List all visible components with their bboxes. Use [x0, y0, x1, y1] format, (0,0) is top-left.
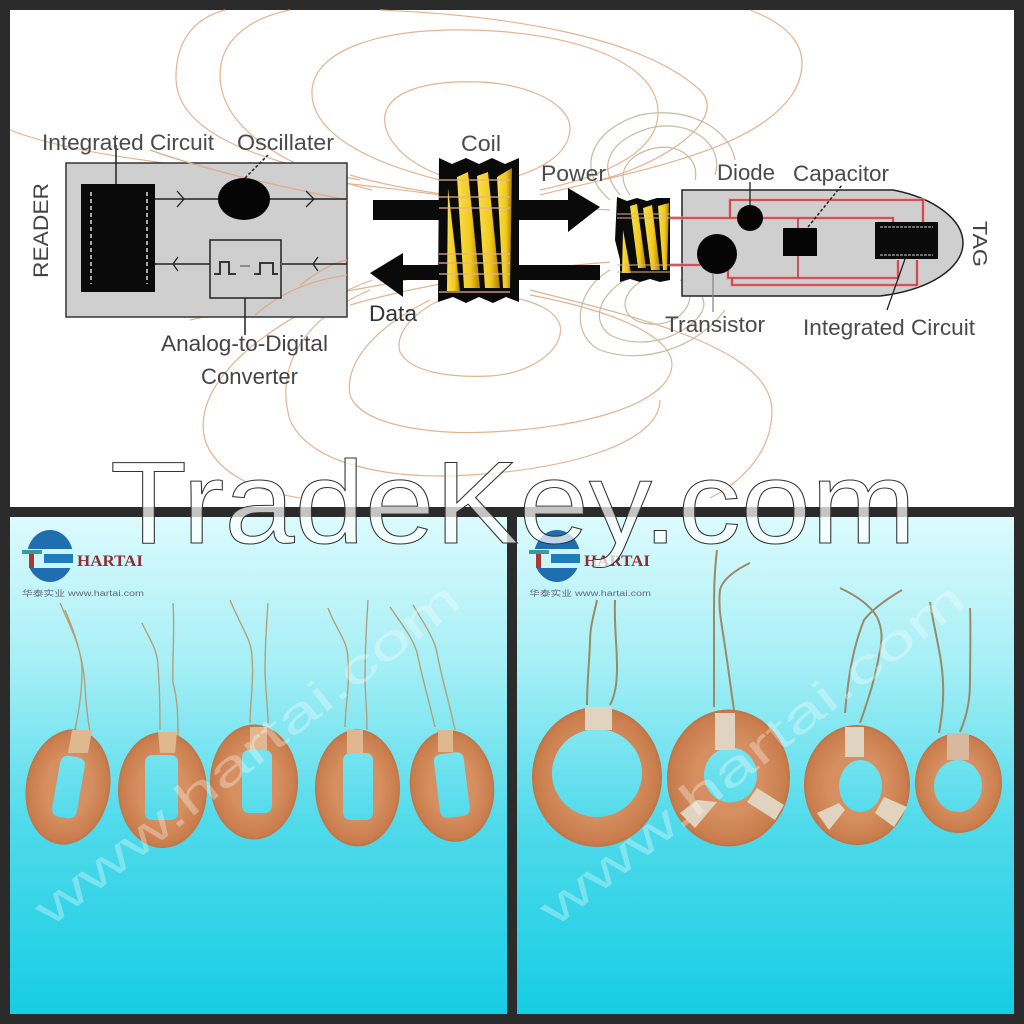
tag circuit wires: [670, 200, 923, 285]
tag integrated circuit label: Integrated Circuit: [803, 315, 975, 340]
converter label: Analog-to-Digital: [161, 331, 328, 356]
tag integrated circuit: [875, 222, 938, 259]
oscillator: [218, 178, 270, 220]
tag body: [670, 182, 963, 312]
logo: 华泰实业 www.hartai.com: [529, 588, 651, 598]
TradeKey watermark: TradeKey.com: [110, 437, 916, 568]
capacitor label: Capacitor: [793, 161, 889, 186]
tag label: TAG: [968, 221, 990, 267]
coil tapes and spokes: [585, 707, 969, 830]
oscillator label: Oscillater: [237, 130, 334, 155]
transistor: [697, 234, 737, 274]
coil label: Coil: [461, 131, 501, 156]
power arrow: [373, 188, 600, 232]
logo: 华泰实业 www.hartai.com: [22, 588, 144, 598]
logo: [22, 530, 144, 598]
watermark: www.hartai.com: [527, 571, 975, 937]
watermark: www.hartai.com: [22, 571, 470, 937]
power label: Power: [541, 161, 606, 186]
diode label: Diode: [717, 160, 775, 185]
reader integrated circuit: [81, 184, 155, 292]
panel: oval coils photo: [10, 517, 507, 1014]
transistor label: Transistor: [665, 312, 765, 337]
reader wires: [116, 145, 347, 335]
magnetic field lines: [10, 10, 802, 498]
converter label line 2: Converter: [201, 364, 298, 389]
analog to digital converter: [210, 240, 281, 298]
panel: RFID diagram: [10, 10, 1014, 507]
logo: HARTAI: [584, 553, 650, 570]
panel: round coils photo: [517, 517, 1014, 1014]
oval coil wires: [60, 600, 455, 737]
diode: [737, 205, 763, 231]
reader label: READER: [30, 183, 53, 278]
reader box: [66, 145, 347, 335]
small coil: [615, 197, 670, 282]
capacitor: [783, 228, 817, 256]
round coil wires: [587, 550, 970, 733]
data arrow: [370, 253, 600, 297]
data label: Data: [369, 301, 418, 326]
integrated circuit label: Integrated Circuit: [42, 130, 214, 155]
coil tapes: [68, 727, 453, 753]
oval copper coils: [17, 723, 501, 851]
large coil: [438, 158, 519, 303]
logo: HARTAI: [77, 553, 143, 570]
logo: [529, 530, 651, 598]
round copper coils: [532, 707, 1002, 847]
